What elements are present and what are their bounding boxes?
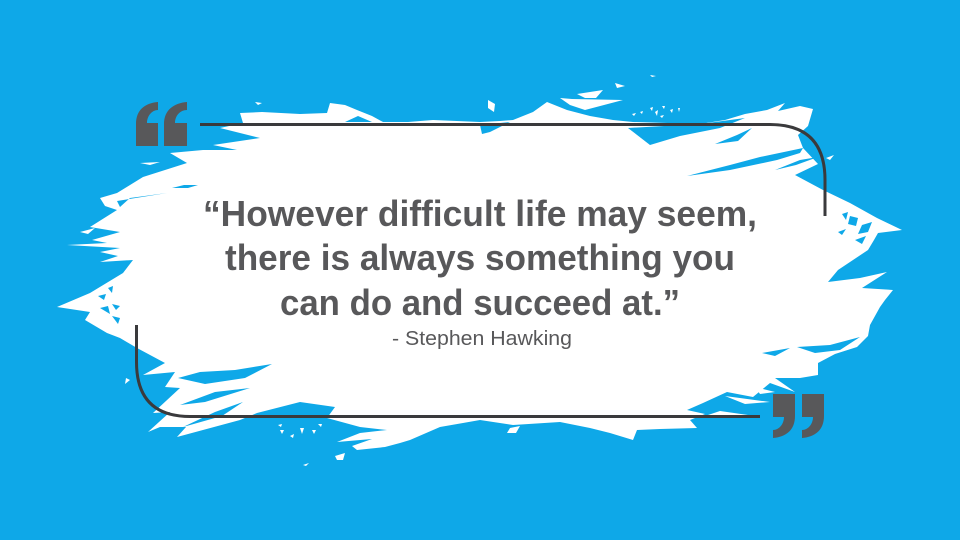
frame line: top and right xyxy=(200,124,825,216)
quote text xyxy=(203,193,757,323)
icon: closing quotation mark xyxy=(773,394,824,438)
quote text: there is always something you xyxy=(225,237,735,278)
attribution: - Stephen Hawking xyxy=(392,328,572,350)
icon: opening quotation mark xyxy=(136,102,187,146)
frame line: left and bottom xyxy=(136,325,760,416)
blue gaps between bristles xyxy=(98,116,872,427)
quote text: “However difficult life may seem, xyxy=(203,193,757,234)
white brush stroke panel xyxy=(57,75,902,466)
white specks and bristle tips xyxy=(80,75,834,466)
quote text: can do and succeed at.” xyxy=(280,282,680,323)
